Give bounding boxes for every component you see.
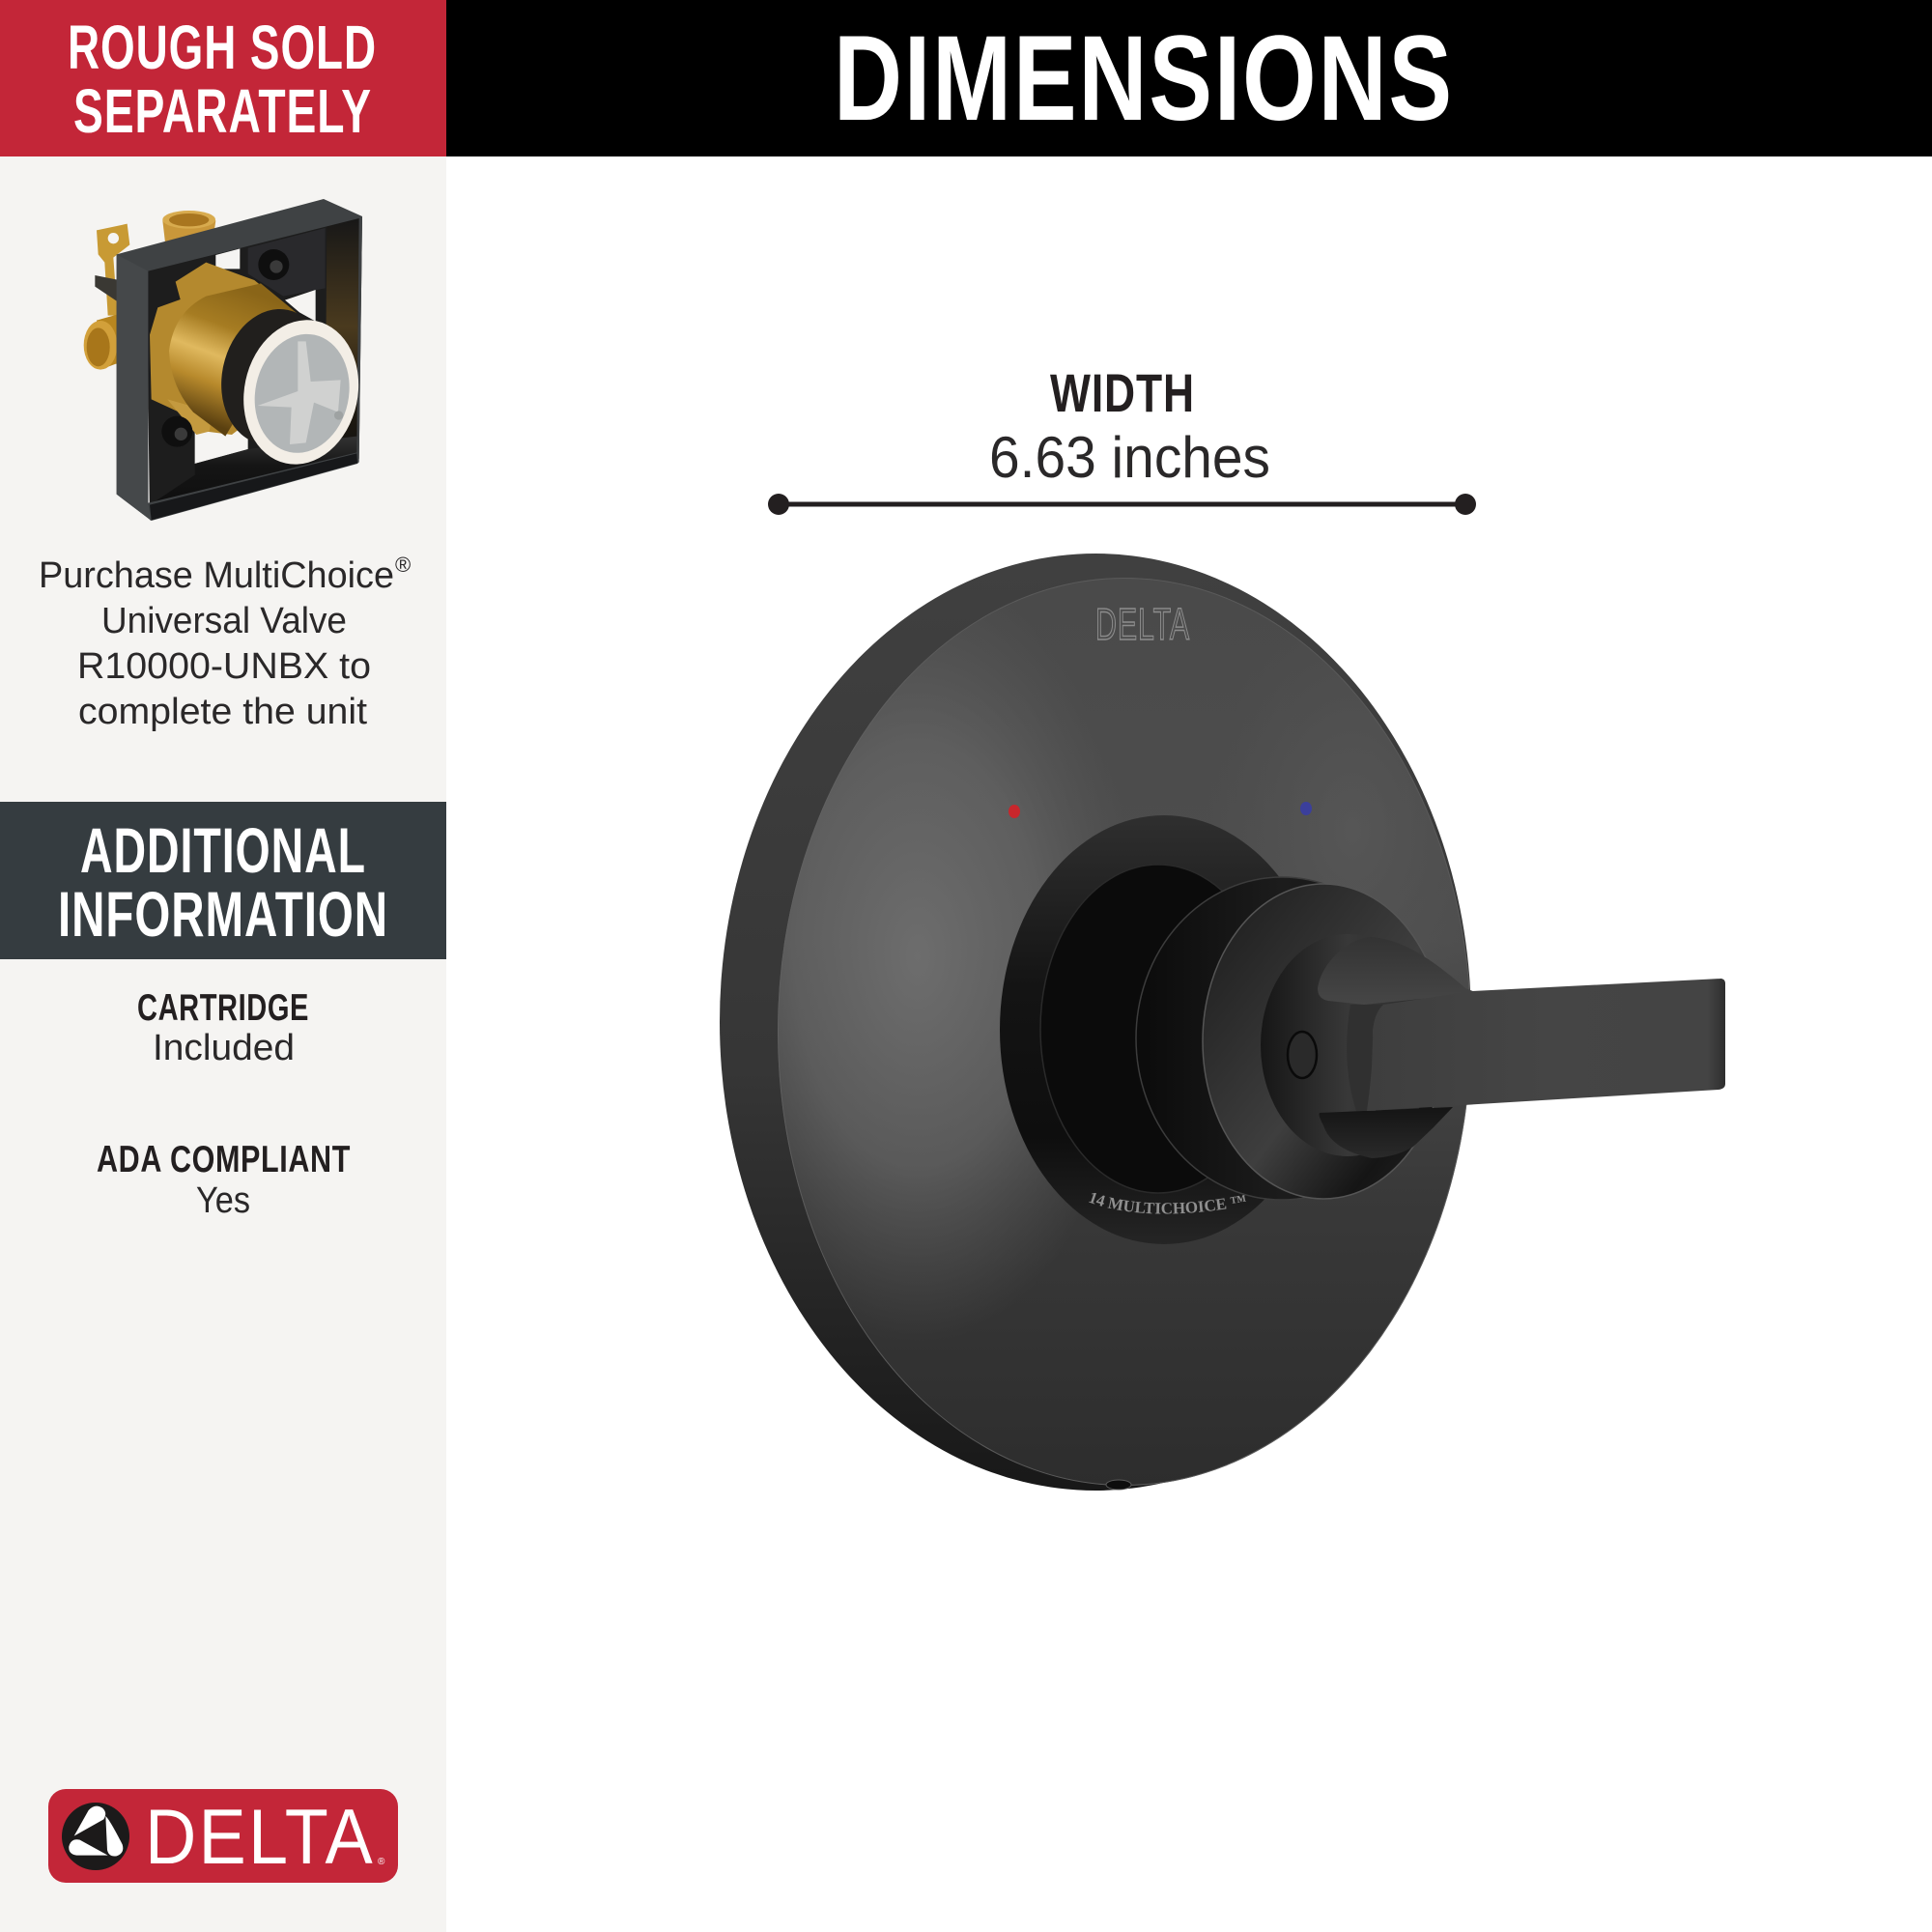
panel: left sidebar (0, 0, 446, 1932)
frame band (117, 199, 362, 521)
dimension label: width: WIDTH (1050, 362, 1195, 423)
lever knob (1318, 937, 1478, 1005)
text block: MultiChoice purchase note (39, 553, 411, 732)
spec: ada compliant: ADA COMPLIANT (97, 1139, 351, 1180)
spec: ada compliant: Yes (196, 1180, 250, 1221)
title: dimensions: DIMENSIONS (834, 12, 1454, 146)
bottom interior wall (152, 437, 357, 520)
frame interior (147, 216, 362, 520)
chrome ring (231, 309, 372, 475)
text block: MultiChoice purchase note: Purchase MultiChoice (39, 555, 394, 596)
spec: cartridge (137, 987, 309, 1068)
lever underside (1320, 1107, 1453, 1158)
rear hub (1040, 865, 1276, 1193)
brass valve body (169, 283, 298, 437)
title: dimensions (446, 0, 1932, 156)
plate edge (720, 554, 1471, 1491)
collar marking: 14 MULTICHOICE ™ (1089, 1192, 1246, 1214)
hot indicator (1009, 805, 1020, 818)
right interior wall (326, 218, 359, 459)
text block: MultiChoice purchase note: R10000-UNBX to (77, 646, 371, 687)
front ring (1203, 884, 1444, 1199)
set-screw button (1288, 1032, 1317, 1078)
logo mark on plate: DELTA (1095, 599, 1190, 649)
barrel (1136, 877, 1428, 1200)
dimension label: width (989, 362, 1270, 490)
product: shower valve trim (720, 554, 1725, 1491)
text block: MultiChoice purchase note: complete the unit (78, 692, 367, 732)
mounting screws (161, 249, 289, 447)
lever (1367, 979, 1725, 1111)
text block: MultiChoice purchase note: Universal Valve (101, 601, 347, 641)
grey cap (243, 326, 360, 462)
dimension line (768, 494, 1476, 515)
banner: rough sold separately: SEPARATELY (73, 76, 372, 146)
heading: additional information (0, 802, 446, 959)
left brass stub (97, 314, 155, 370)
heading: additional information: ADDITIONAL (80, 814, 366, 886)
mounting hole (1106, 1480, 1131, 1490)
escutcheon collar (1000, 815, 1328, 1244)
image: MultiChoice universal valve (84, 199, 372, 521)
plate face (778, 578, 1470, 1486)
logo: Delta (48, 1789, 398, 1883)
heading: additional information: INFORMATION (58, 878, 388, 950)
brass flanges (150, 263, 290, 435)
banner: rough sold separately: ROUGH SOLD (68, 13, 377, 82)
dimension label: width: 6.63 inches (989, 425, 1270, 490)
cold indicator (1300, 802, 1312, 815)
text block: MultiChoice purchase note: ® (395, 553, 411, 577)
lever neck (1347, 1005, 1385, 1111)
spec: cartridge: Included (153, 1028, 295, 1068)
inner recess (1261, 934, 1435, 1156)
mounting tab (97, 224, 129, 316)
spec: cartridge: CARTRIDGE (137, 987, 309, 1029)
see-through openings (285, 290, 316, 322)
logo: Delta: DELTA (145, 1794, 375, 1881)
spec: ada compliant (97, 1139, 351, 1221)
black sleeve (209, 299, 338, 454)
banner: rough sold separately (0, 0, 446, 156)
logo: Delta: ® (378, 1857, 385, 1867)
top brass stub (162, 214, 215, 248)
